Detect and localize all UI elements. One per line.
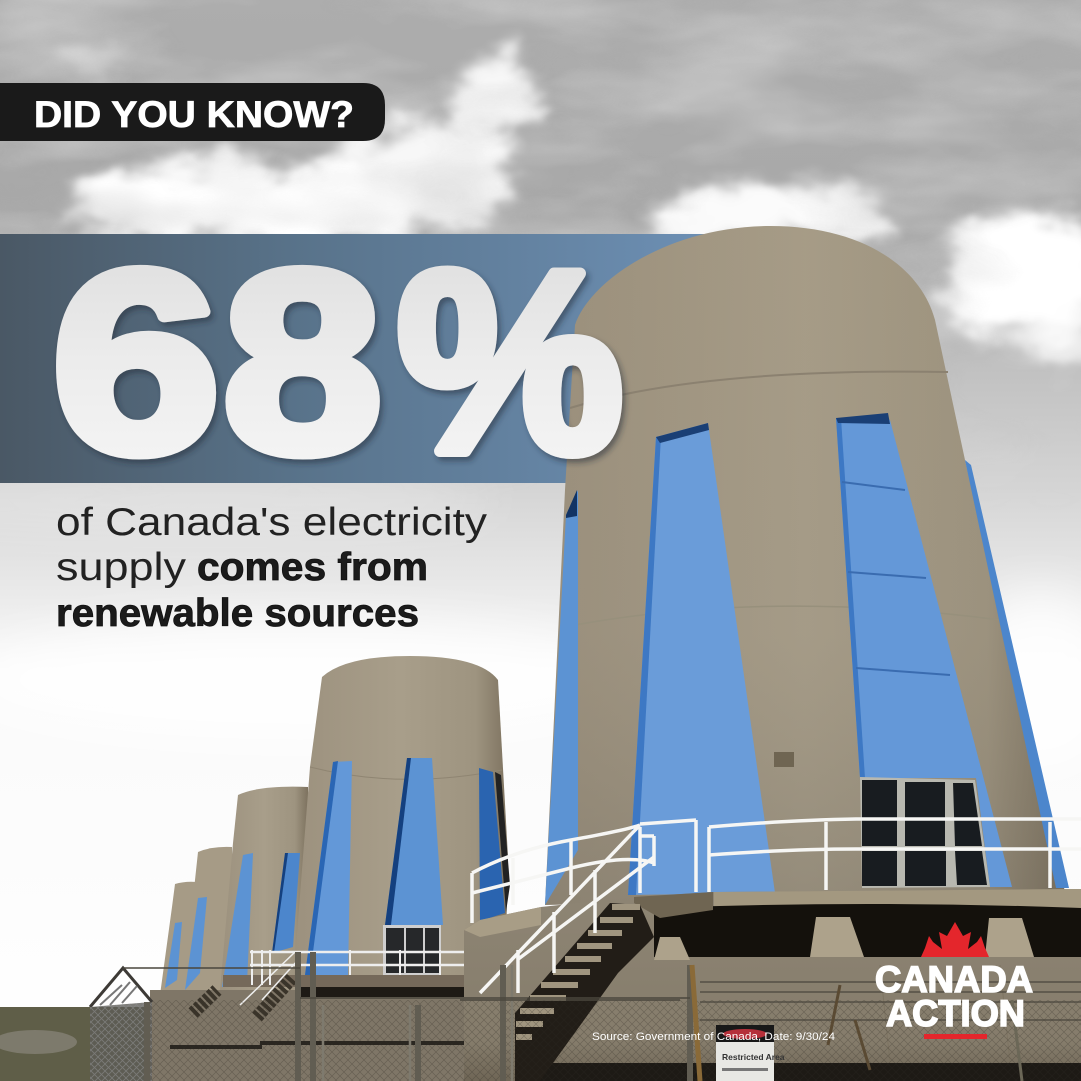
small tower, farthest <box>160 882 197 995</box>
blue number band <box>0 234 720 483</box>
did you know pill <box>0 83 385 141</box>
lower concrete base under the small towers <box>150 950 476 1081</box>
restricted area sign <box>716 1025 785 1081</box>
icon: maple leaf <box>921 922 989 957</box>
headline text: supply <box>56 546 187 589</box>
headline text <box>56 501 488 635</box>
cloudy sky background <box>0 0 1081 641</box>
small tower, second <box>220 787 308 990</box>
headline text: comes from <box>197 546 428 589</box>
large tower far-right blue panel <box>965 460 1069 888</box>
Canada Action logo: ACTION <box>886 993 1025 1034</box>
Canada Action logo: CANADA <box>875 959 1033 1000</box>
large tower right blue panel <box>836 413 1012 887</box>
restricted area sign: Restricted Area <box>722 1052 785 1062</box>
large tower centre blue panel <box>628 423 775 895</box>
white clouds <box>65 48 1081 375</box>
headline text: renewable sources <box>56 592 419 635</box>
big 68 percent: 8 <box>223 217 382 506</box>
large tower door and windows <box>860 777 990 888</box>
large tower pedestal, deck and wall <box>464 889 1081 1081</box>
Canada Action logo <box>875 922 1033 1039</box>
small tower, third <box>183 847 232 995</box>
headline text: of Canada's electricity <box>56 501 488 544</box>
big 68 percent <box>52 217 623 506</box>
large tower body <box>545 226 1069 905</box>
door, medium tower <box>383 925 441 975</box>
white railings <box>472 819 1081 993</box>
ground at horizon <box>0 1007 170 1081</box>
wall lamp <box>774 752 794 767</box>
big 68 percent: % <box>397 217 623 506</box>
medium tower <box>293 656 510 985</box>
big 68 percent: 6 <box>52 217 220 506</box>
chain-link fence <box>90 952 1081 1081</box>
large tower left blue panel <box>545 490 578 905</box>
source note: Source: Government of Canada, Date: 9/30/24 <box>592 1031 835 1043</box>
did you know pill: DID YOU KNOW? <box>34 94 354 135</box>
staircase <box>515 903 654 1081</box>
